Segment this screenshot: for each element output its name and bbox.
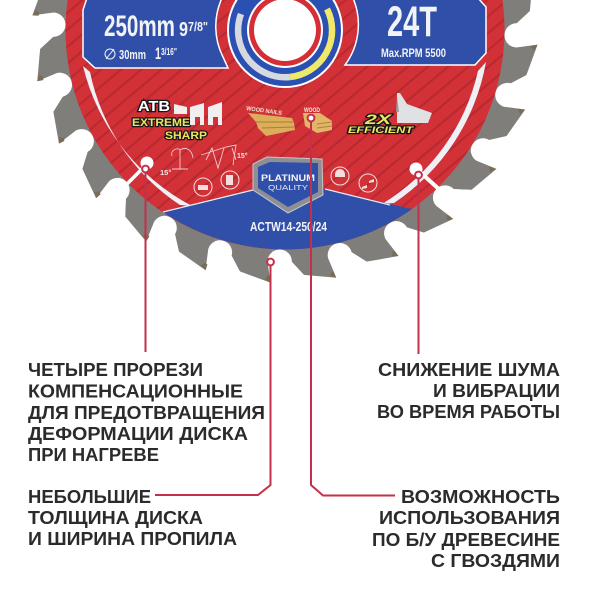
text: reclaimed wood: ПО Б/У ДРЕВЕСИНЕ	[372, 530, 560, 550]
text: four slots	[28, 360, 265, 465]
icon: wood: WOOD	[304, 108, 321, 114]
left size panel: 7/8"	[188, 19, 208, 34]
icon: wood with nails	[246, 106, 295, 136]
angle diagrams: 15°	[160, 168, 171, 177]
text: noise reduction: И ВИБРАЦИИ	[433, 381, 560, 401]
expansion slots	[83, 62, 486, 206]
red disc	[66, 0, 504, 250]
text: four slots: ДЛЯ ПРЕДОТВРАЩЕНИЯ	[28, 403, 265, 423]
left size panel	[83, 0, 228, 68]
angle diagrams: 15°	[237, 152, 248, 160]
text: reclaimed wood: ВОЗМОЖНОСТЬ	[401, 487, 560, 507]
text: reclaimed wood	[372, 487, 560, 571]
icon: ATB extreme sharp	[132, 99, 222, 142]
left size panel: 250mm	[104, 10, 175, 43]
text: four slots: КОМПЕНСАЦИОННЫЕ	[28, 382, 243, 402]
text: thin kerf	[28, 487, 237, 549]
blade steel body with teeth	[15, 0, 555, 300]
leader: slots	[142, 166, 149, 352]
text: four slots: ЧЕТЫРЕ ПРОРЕЗИ	[28, 360, 203, 380]
right teeth panel: Max.RPM 5500	[381, 48, 446, 60]
leader: wood	[308, 115, 395, 495]
badge: platinum quality: QUALITY	[268, 183, 308, 192]
left size panel: 3/16"	[161, 47, 177, 58]
badge: platinum quality: PLATINUM	[261, 173, 315, 184]
text: four slots: ПРИ НАГРЕВЕ	[28, 445, 159, 465]
saw blade	[15, 0, 555, 300]
icon: ATB extreme sharp: EXTREME	[132, 117, 190, 129]
left size panel: 1	[155, 44, 161, 63]
icon: wood	[303, 108, 332, 133]
icon: ATB extreme sharp: SHARP	[165, 130, 207, 142]
leader: thickness	[155, 259, 274, 495]
angle diagrams	[160, 145, 248, 177]
model code: ACTW14-250/24	[250, 219, 328, 234]
centre hub rings	[227, 0, 343, 88]
right teeth panel	[345, 0, 486, 65]
safety icons	[194, 167, 377, 196]
badge: platinum quality	[253, 157, 323, 213]
left size panel: 9	[179, 19, 188, 41]
text: reclaimed wood: С ГВОЗДЯМИ	[431, 551, 560, 571]
text: noise reduction: СНИЖЕНИЕ ШУМА	[378, 360, 560, 380]
left size panel: 30mm	[119, 47, 146, 62]
text: reclaimed wood: ИСПОЛЬЗОВАНИЯ	[379, 508, 560, 528]
icon: 2X efficient: EFFICIENT	[348, 125, 415, 135]
icon: wood with nails: WOOD NAILS	[246, 106, 282, 117]
blue lower segment	[163, 189, 412, 249]
text: noise reduction: ВО ВРЕМЯ РАБОТЫ	[377, 402, 560, 422]
text: noise reduction	[377, 360, 560, 422]
leader: noise	[415, 172, 422, 354]
text: thin kerf: НЕБОЛЬШИЕ	[28, 487, 151, 507]
icon: 2X efficient: 2X	[363, 111, 394, 127]
icon: ATB extreme sharp: ATB	[138, 99, 170, 115]
icon: 2X efficient	[348, 93, 432, 135]
text: thin kerf: И ШИРИНА ПРОПИЛА	[28, 529, 237, 549]
text: four slots: ДЕФОРМАЦИИ ДИСКА	[28, 424, 248, 444]
text: thin kerf: ТОЛЩИНА ДИСКА	[28, 508, 203, 528]
